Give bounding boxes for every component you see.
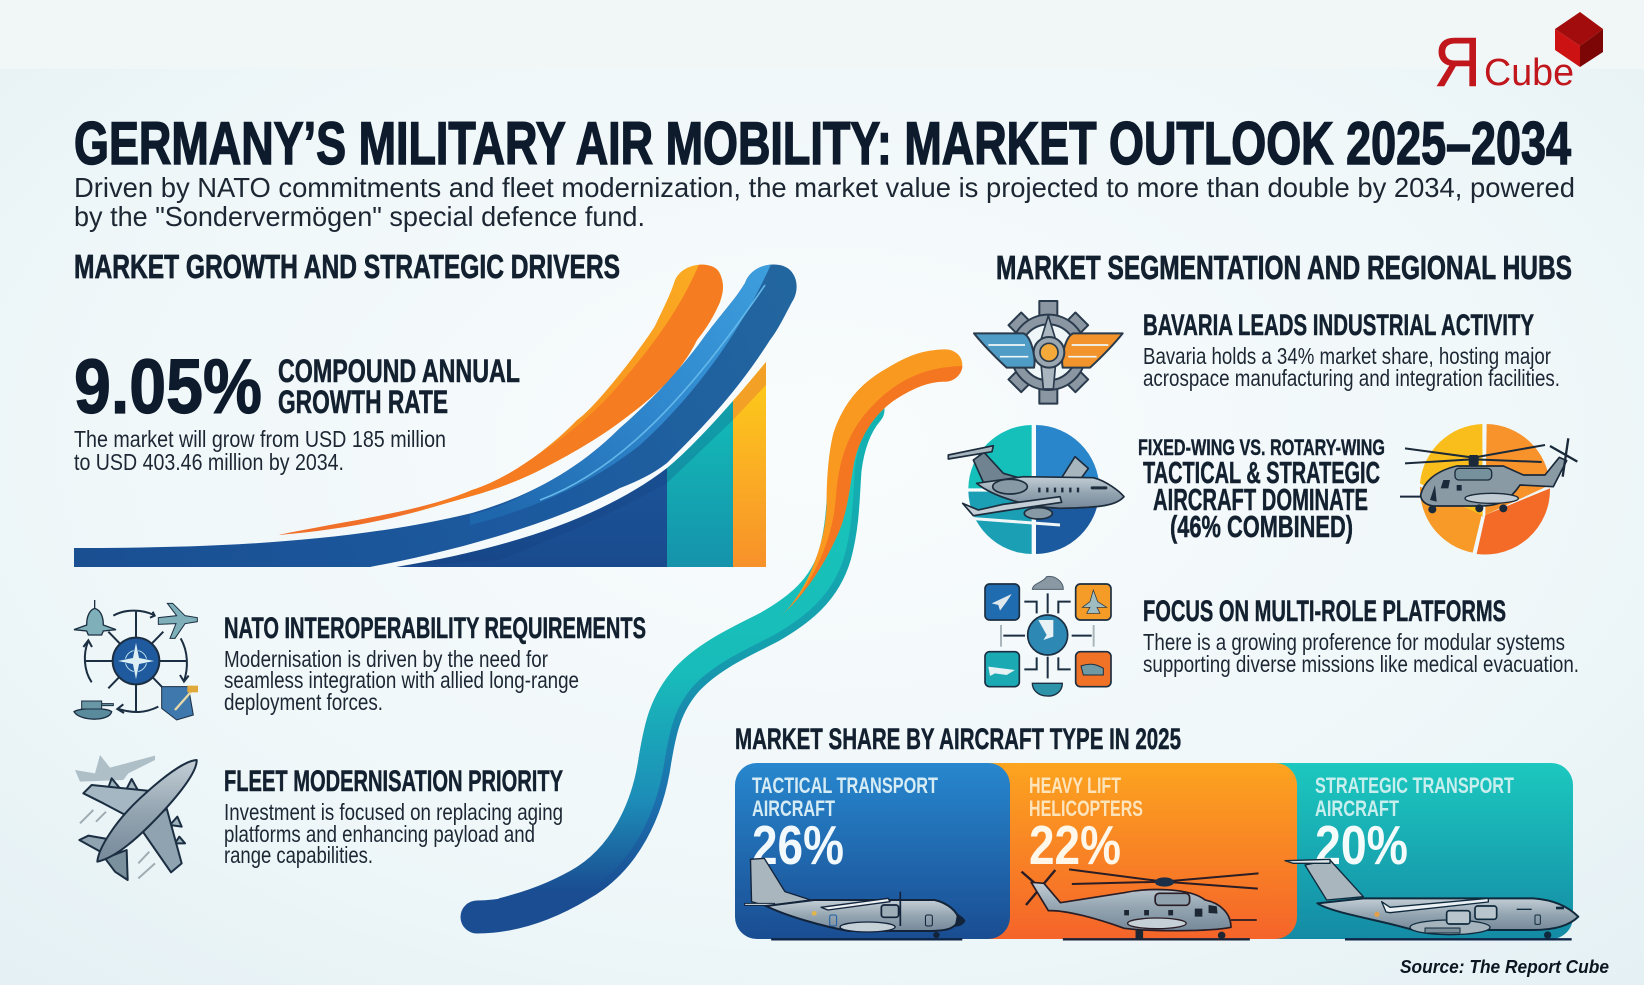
text: market growth description: The market will grow from USD 185 million: [74, 426, 446, 452]
orange growth swoosh: [280, 264, 723, 535]
logo: RCube: Я: [1434, 23, 1481, 101]
text: multi-role platforms: [1143, 595, 1579, 677]
text: NATO interoperability: Modernisation is driven by the need for: [224, 646, 548, 672]
stat: 9.05% CAGR: COMPOUND ANNUAL: [278, 353, 520, 389]
icon: NATO network: [74, 600, 198, 720]
text: fixed-wing vs rotary-wing: AIRCRAFT DOMINATE: [1153, 482, 1368, 517]
card: heavy lift helicopters: HEAVY LIFT: [1029, 773, 1121, 798]
subtitle: [74, 172, 1575, 232]
text: Bavaria: [1143, 309, 1560, 391]
card: tactical transport aircraft: 26%: [752, 814, 844, 876]
card: strategic transport aircraft: AIRCRAFT: [1315, 796, 1399, 821]
aircraft: heavy lift helicopter: [1022, 869, 1258, 939]
icon: gear with wings: [974, 301, 1123, 404]
icon: rotary-wing pie with helicopter: [1400, 424, 1577, 555]
icon: fleet modernisation plane: [75, 755, 197, 880]
card: heavy lift helicopters: 22%: [1029, 814, 1121, 876]
blue growth swoosh: [70, 255, 800, 570]
card: strategic transport aircraft: STRATEGIC TRANSPORT: [1315, 773, 1514, 798]
chart: growth swooshes: [70, 255, 800, 570]
text: NATO interoperability: deployment forces.: [224, 689, 383, 715]
text: fleet modernisation: [224, 765, 563, 868]
subtitle: by the "Sondervermögen" special defence fund.: [74, 201, 645, 232]
text: fleet modernisation: range capabilities.: [224, 842, 373, 868]
card: heavy lift helicopters: [985, 763, 1297, 939]
text: Bavaria: Bavaria holds a 34% market share, hosting major: [1143, 343, 1551, 369]
text: fixed-wing vs rotary-wing: (46% COMBINED): [1170, 509, 1353, 544]
text: NATO interoperability: NATO INTEROPERABILITY REQUIREMENTS: [224, 612, 646, 645]
stat: 9.05% CAGR: 9.05%: [74, 344, 262, 430]
logo: RCube: [1434, 12, 1603, 101]
icon: fixed-wing pie with jet: [948, 425, 1124, 554]
heading: market share by aircraft type: MARKET SHARE BY AIRCRAFT TYPE IN 2025: [735, 723, 1181, 756]
subtitle: Driven by NATO commitments and fleet modernization, the market value is projected to more than double by 2034, powered: [74, 172, 1575, 203]
icon: multi-role network: [985, 576, 1111, 696]
aircraft: tactical transport: [745, 858, 965, 939]
text: market growth description: [74, 426, 446, 475]
flowing S-curve ribbon: [477, 349, 962, 917]
text: NATO interoperability: [224, 612, 646, 715]
text: fleet modernisation: FLEET MODERNISATION PRIORITY: [224, 765, 563, 798]
stepped area columns: [390, 355, 766, 570]
card: tactical transport aircraft: [735, 763, 1010, 939]
text: fixed-wing vs rotary-wing: [1138, 435, 1385, 544]
aircraft: strategic transport: [1285, 859, 1578, 939]
text: fixed-wing vs rotary-wing: FIXED-WING VS. ROTARY-WING: [1138, 435, 1385, 460]
card: strategic transport aircraft: 20%: [1315, 814, 1408, 876]
stat: 9.05% CAGR: GROWTH RATE: [278, 384, 448, 420]
card: strategic transport aircraft: [1260, 763, 1573, 939]
market share cards: [735, 763, 1578, 939]
text: fleet modernisation: Investment is focused on replacing aging: [224, 799, 563, 825]
text: fixed-wing vs rotary-wing: TACTICAL & STRATEGIC: [1143, 455, 1380, 490]
source note: Source: The Report Cube: [1400, 957, 1609, 977]
card: tactical transport aircraft: AIRCRAFT: [752, 796, 835, 821]
text: fleet modernisation: platforms and enhancing payload and: [224, 821, 535, 847]
card: heavy lift helicopters: HELICOPTERS: [1029, 796, 1143, 821]
stat: 9.05% CAGR: [74, 344, 520, 430]
text: Bavaria: acrospace manufacturing and integration facilities.: [1143, 365, 1560, 391]
text: NATO interoperability: seamless integration with allied long-range: [224, 667, 579, 693]
heading: market growth and strategic drivers: MARKET GROWTH AND STRATEGIC DRIVERS: [74, 248, 620, 285]
text: market growth description: to USD 403.46 million by 2034.: [74, 449, 344, 475]
card: tactical transport aircraft: TACTICAL TRANSPORT: [752, 773, 938, 798]
logo: RCube: Cube: [1484, 52, 1574, 94]
